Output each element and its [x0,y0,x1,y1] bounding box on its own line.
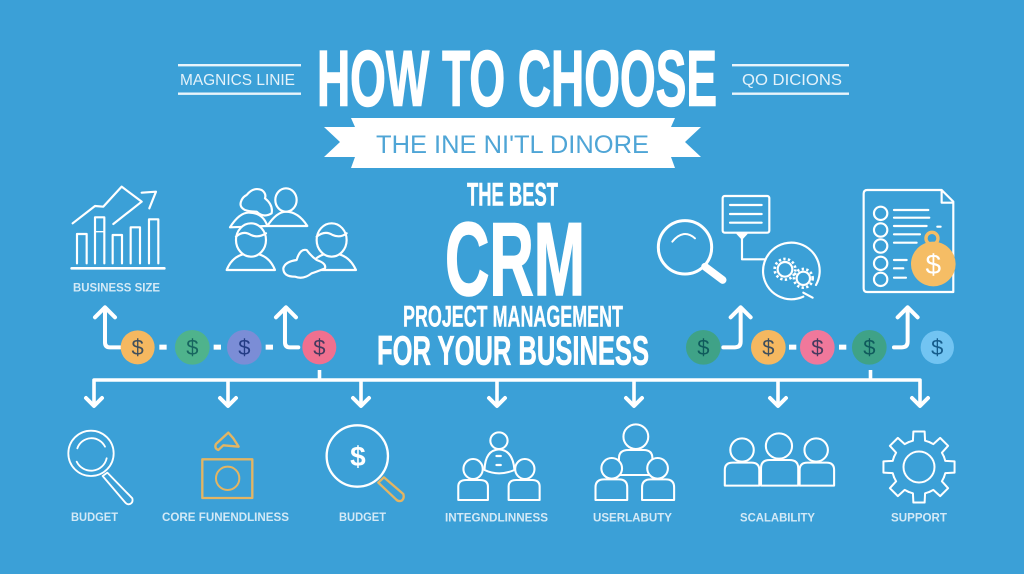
right coin row with arrows: $ [762,335,774,360]
center heading: FOR YOUR BUSINESS [377,328,649,374]
label: business size: BUSINESS SIZE [73,282,160,294]
right coin row with arrows: $ [811,335,823,360]
connector with down arrows [86,370,928,406]
label: scalability: SCALABILITY [740,512,815,524]
icon: support gear [883,431,955,503]
center heading: PROJECT MANAGEMENT [403,300,623,334]
label: core funendliness: CORE FUNENDLINESS [162,512,289,524]
label: support: SUPPORT [891,512,947,524]
right side tag: QO DICIONS [742,72,842,89]
ribbon banner: THE INE NI'TL DINORE [376,131,649,159]
center heading: CRM [445,202,585,318]
right coin row with arrows: $ [931,335,943,360]
left coin row with arrows: $ [132,335,144,360]
icon: scalability people [725,433,834,486]
icon: business size chart [72,187,164,268]
left coin row with arrows: $ [238,335,250,360]
label: integndlinness: INTEGNDLINNESS [445,512,548,524]
title: HOW TO CHOOSE [317,34,717,122]
left coin row with arrows: $ [313,335,325,360]
label: budget second: BUDGET [339,512,386,524]
ribbon banner [324,118,701,168]
right side tag [732,64,849,95]
right coin row with arrows: $ [863,335,875,360]
icon: magnifier top [658,221,723,280]
icon: budget dollar magnifier: $ [350,441,366,472]
center heading: THE BEST [467,176,558,212]
left side tag [178,64,301,95]
left coin row with arrows [95,307,336,365]
icon: chat and gears [723,196,820,299]
icon: budget dollar magnifier [327,425,404,501]
icon: usability people [596,424,674,500]
icon: document with price tag: $ [926,249,942,280]
label: userlabuty: USERLABUTY [593,512,672,524]
icon: integration people [458,432,540,500]
center heading [377,176,649,374]
icon: document with price tag [864,190,956,292]
icon: people group [227,188,356,278]
icon: core functionality box [202,433,252,498]
right coin row with arrows [686,307,954,365]
left coin row with arrows: $ [186,335,198,360]
left side tag: MAGNICS LINIE [180,72,295,89]
icon: budget magnifier [68,431,133,504]
right coin row with arrows: $ [697,335,709,360]
label: budget: BUDGET [71,512,118,524]
